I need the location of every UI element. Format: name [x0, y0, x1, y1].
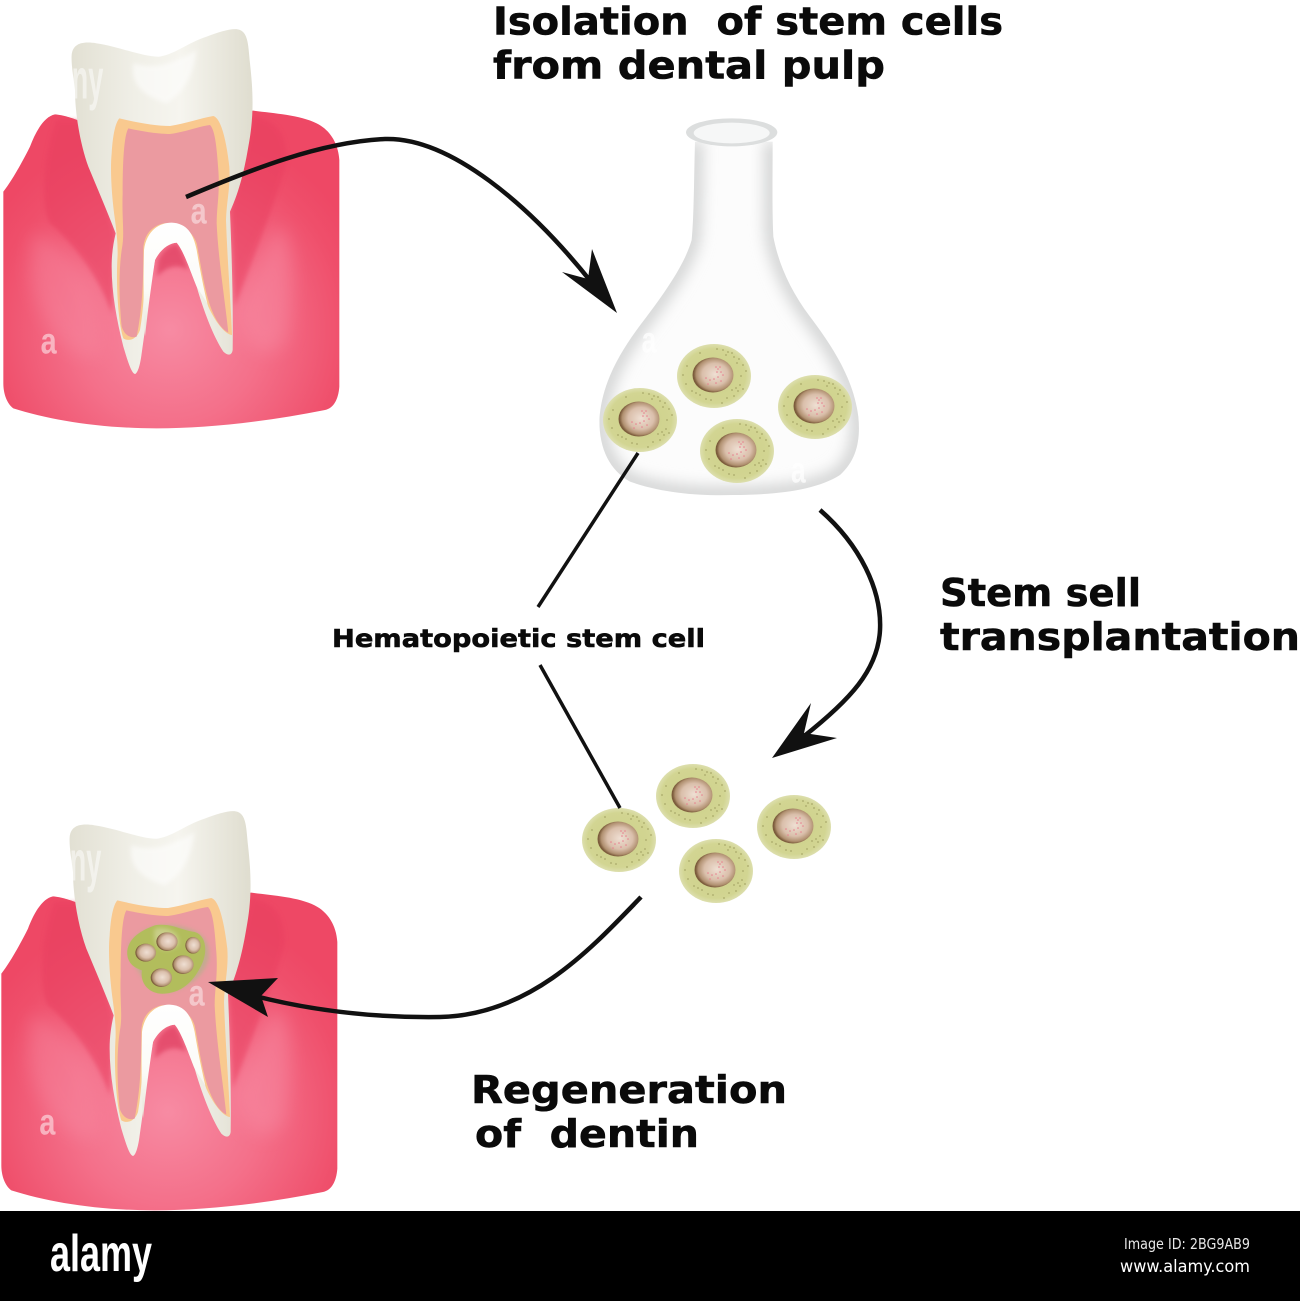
- heading: isolation of stem cells: from dental pulp: [493, 44, 885, 88]
- illustration: healthy tooth in gum: a: [41, 320, 57, 361]
- logo: alamy: alamy: [50, 1225, 152, 1283]
- image id: Image ID: 2BG9AB9: [1124, 1235, 1250, 1253]
- leader line: label to free cell: [540, 665, 620, 808]
- illustration: tooth with transplanted cells in gum: a: [189, 972, 205, 1013]
- footer bar: [0, 1211, 1300, 1301]
- label: hematopoietic stem cell: Hematopoietic stem cell: [332, 624, 705, 653]
- heading: stem cell transplantation: transplantation: [940, 615, 1300, 660]
- cell cluster inside pulp: [127, 925, 209, 994]
- arrow: flask to free stem cells: [772, 510, 880, 758]
- heading: regeneration of dentin: of dentin: [475, 1112, 699, 1157]
- leader line: flask cell to label: [538, 453, 638, 607]
- stem cell in flask 4: [700, 419, 774, 483]
- heading: isolation of stem cells: Isolation of stem cells: [493, 0, 1003, 44]
- stem cell in flask 3: [778, 375, 852, 439]
- heading: isolation of stem cells: [493, 0, 1003, 88]
- illustration: tooth with transplanted cells in gum: ny: [70, 830, 102, 893]
- illustration: healthy tooth in gum: ny: [72, 48, 104, 111]
- arrow: stem cells to treated tooth: [208, 897, 641, 1017]
- heading: stem cell transplantation: [940, 571, 1300, 660]
- heading: regeneration of dentin: Regeneration: [471, 1068, 787, 1113]
- free stem cells: [582, 764, 831, 903]
- heading: stem cell transplantation: Stem sell: [940, 571, 1141, 616]
- flask with stem cells: a: [642, 320, 657, 361]
- website: www.alamy.com: [1120, 1257, 1250, 1277]
- illustration: healthy tooth in gum: [3, 29, 339, 428]
- illustration: healthy tooth in gum: a: [191, 190, 207, 231]
- illustration: tooth with transplanted cells in gum: a: [39, 1102, 56, 1143]
- flask with stem cells: a: [791, 450, 806, 491]
- stem cell in flask 1: [603, 388, 677, 452]
- heading: regeneration of dentin: [471, 1068, 787, 1157]
- arrow: tooth pulp to flask: [186, 139, 617, 313]
- illustration: tooth with transplanted cells in gum: [1, 811, 337, 1210]
- stem cell in flask 2: [677, 344, 751, 408]
- flask with stem cells: [599, 118, 859, 495]
